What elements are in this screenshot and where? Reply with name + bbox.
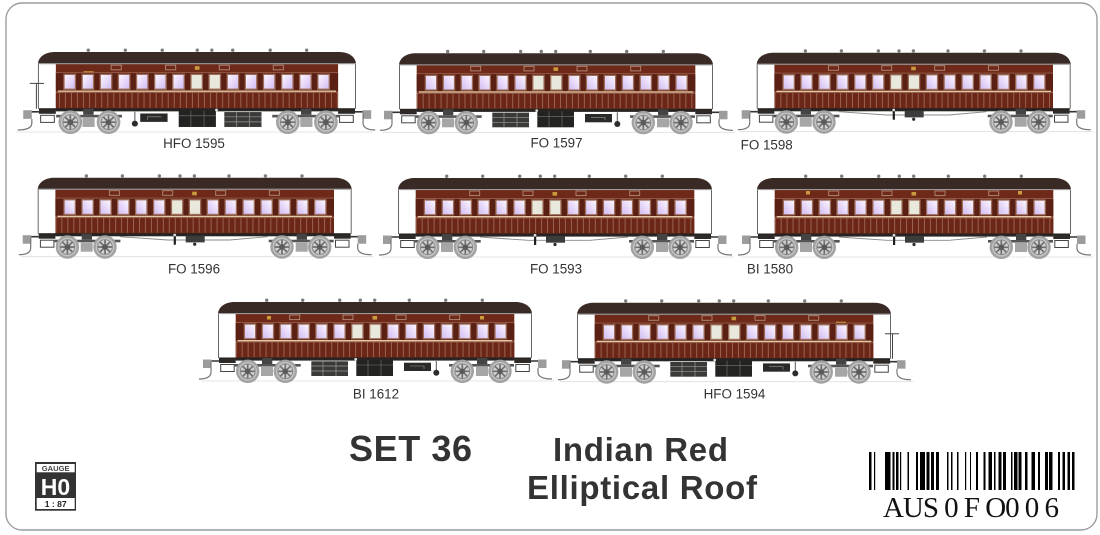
- label: FO 1598: FO 1598: [741, 137, 793, 152]
- barcode number: AUS 0 F O0 0 6: [883, 492, 1059, 524]
- subtitle: colour scheme: Indian Red: [553, 431, 728, 468]
- coach: BI 1612: [199, 298, 554, 382]
- coach: FO 1596: [19, 174, 374, 258]
- barcode: [869, 452, 1074, 524]
- label: BI 1612: BI 1612: [353, 386, 399, 401]
- label: BI 1580: BI 1580: [747, 262, 793, 276]
- label: HFO 1594: HFO 1594: [704, 386, 766, 401]
- label: FO 1593: FO 1593: [530, 262, 582, 276]
- coach: FO 1597: [380, 50, 735, 133]
- badge: gauge H0 1:87: GAUGE: [42, 464, 70, 473]
- subtitle: roof type: Elliptical Roof: [527, 469, 758, 506]
- title: set number: SET 36: [349, 428, 472, 469]
- label: HFO 1595: HFO 1595: [163, 136, 225, 151]
- coach: FO 1593: [379, 174, 734, 258]
- coach: HFO 1595: [16, 48, 375, 133]
- coach: BI 1580: [738, 174, 1093, 258]
- label: FO 1597: FO 1597: [530, 136, 583, 151]
- badge: gauge H0 1:87: 1 : 87: [45, 499, 67, 509]
- coach: FO 1598: [738, 49, 1093, 133]
- label: FO 1596: FO 1596: [168, 261, 220, 276]
- badge: gauge H0 1:87: [35, 462, 76, 511]
- badge: gauge H0 1:87: H0: [41, 474, 70, 500]
- coach: HFO 1594: [558, 299, 913, 382]
